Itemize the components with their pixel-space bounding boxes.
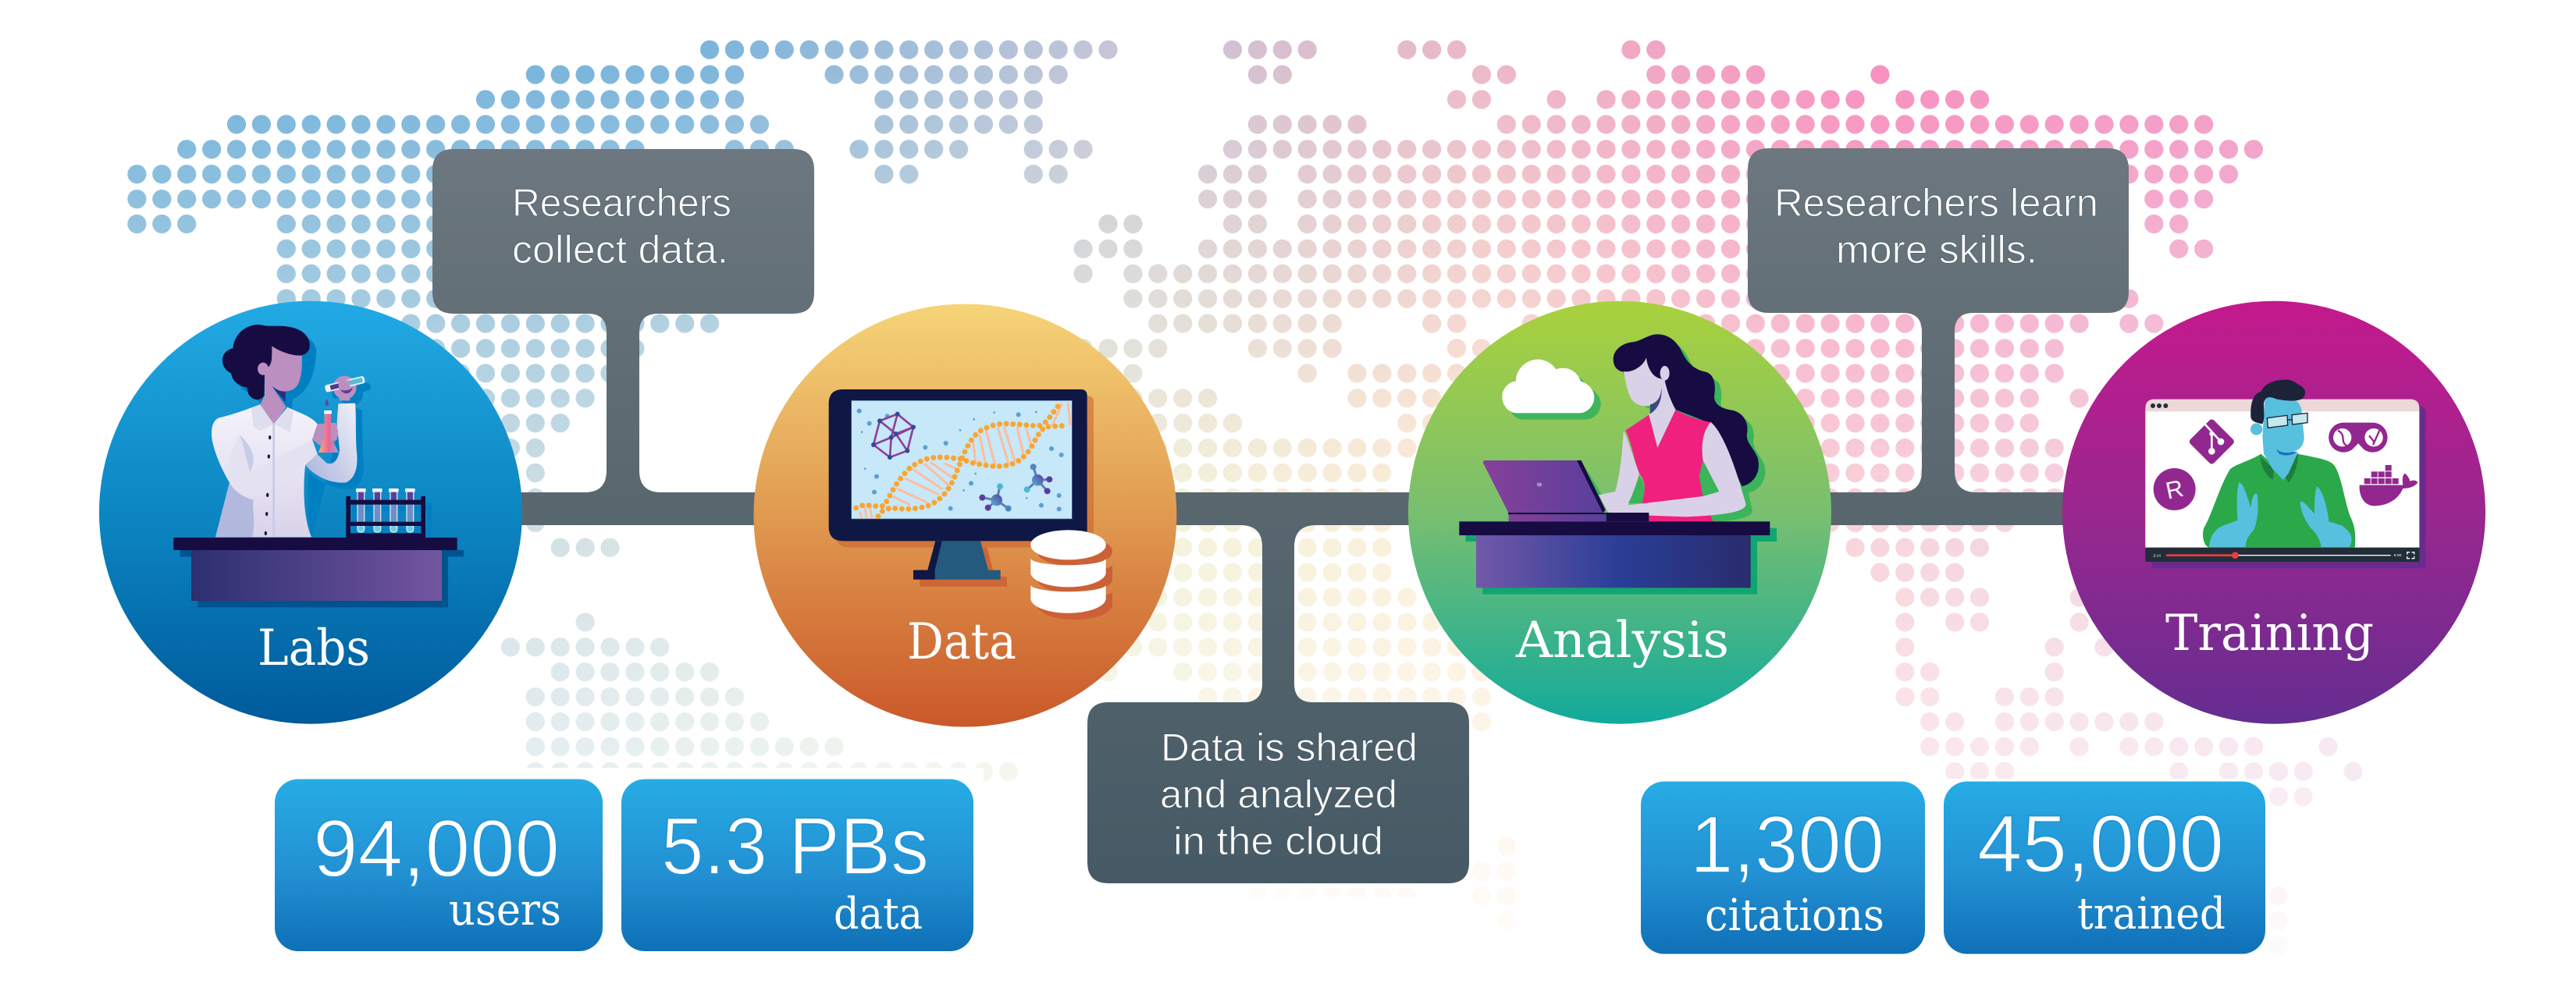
connector with three caption boxes (312, 148, 2186, 883)
icon: database cylinders (1030, 530, 1112, 620)
stat: 45,000 trained: 45,000 (1977, 799, 2224, 890)
icon: binoculars (2329, 423, 2388, 453)
icon: R language (2154, 468, 2196, 510)
stat: 94,000 users (275, 779, 603, 951)
stat: 94,000 users: 94,000 (313, 804, 560, 894)
icon: instructor in video window (2145, 379, 2426, 568)
stat: 45,000 trained: trained (2077, 889, 2226, 939)
caption: researchers learn more skills: Researchers learn (1774, 181, 2098, 225)
panel: analysis circle (1408, 301, 1831, 724)
stat: 1,300 citations: citations (1705, 890, 1884, 941)
label: Labs: Labs (258, 620, 370, 677)
stat: 1,300 citations: 1,300 (1690, 800, 1884, 890)
icon: monitor with DNA and database (829, 389, 1112, 620)
caption: data shared in the cloud (1160, 726, 1418, 863)
label: Training: Training (2165, 605, 2374, 662)
caption: researchers collect data (512, 181, 731, 272)
caption: data shared in the cloud: in the cloud (1173, 819, 1383, 863)
icon: instructor in video window: 2:14 (2153, 554, 2161, 559)
caption: researchers collect data: collect data. (512, 228, 728, 272)
caption: data shared in the cloud: Data is shared (1161, 726, 1418, 769)
icon: docker whale (2360, 465, 2418, 506)
stat: 5.3 PBs data (621, 779, 973, 951)
caption: researchers learn more skills (1774, 181, 2098, 272)
icon: instructor in video window: 6:00 (2394, 553, 2402, 558)
caption: researchers learn more skills: more skills. (1836, 228, 2037, 272)
stat: 5.3 PBs data: 5.3 PBs (661, 801, 929, 892)
stat: 1,300 citations (1641, 782, 1925, 954)
world map of dots (127, 40, 2362, 905)
icon: scientist at lab bench (173, 325, 464, 607)
panel: training circle (2062, 301, 2485, 724)
stat: 5.3 PBs data: data (834, 889, 923, 939)
caption: data shared in the cloud: and analyzed (1160, 772, 1397, 816)
stat: 45,000 trained (1944, 782, 2265, 954)
icon: git (2188, 418, 2236, 465)
icon: R language: R (2163, 475, 2186, 505)
stat: 94,000 users: users (449, 885, 561, 936)
panel: data circle (753, 304, 1176, 727)
label: Analysis: Analysis (1515, 612, 1729, 669)
label: Data: Data (907, 613, 1016, 671)
icon: woman using laptop with cloud (1459, 334, 1777, 595)
caption: researchers collect data: Researchers (512, 181, 731, 225)
panel: labs circle (99, 301, 522, 724)
